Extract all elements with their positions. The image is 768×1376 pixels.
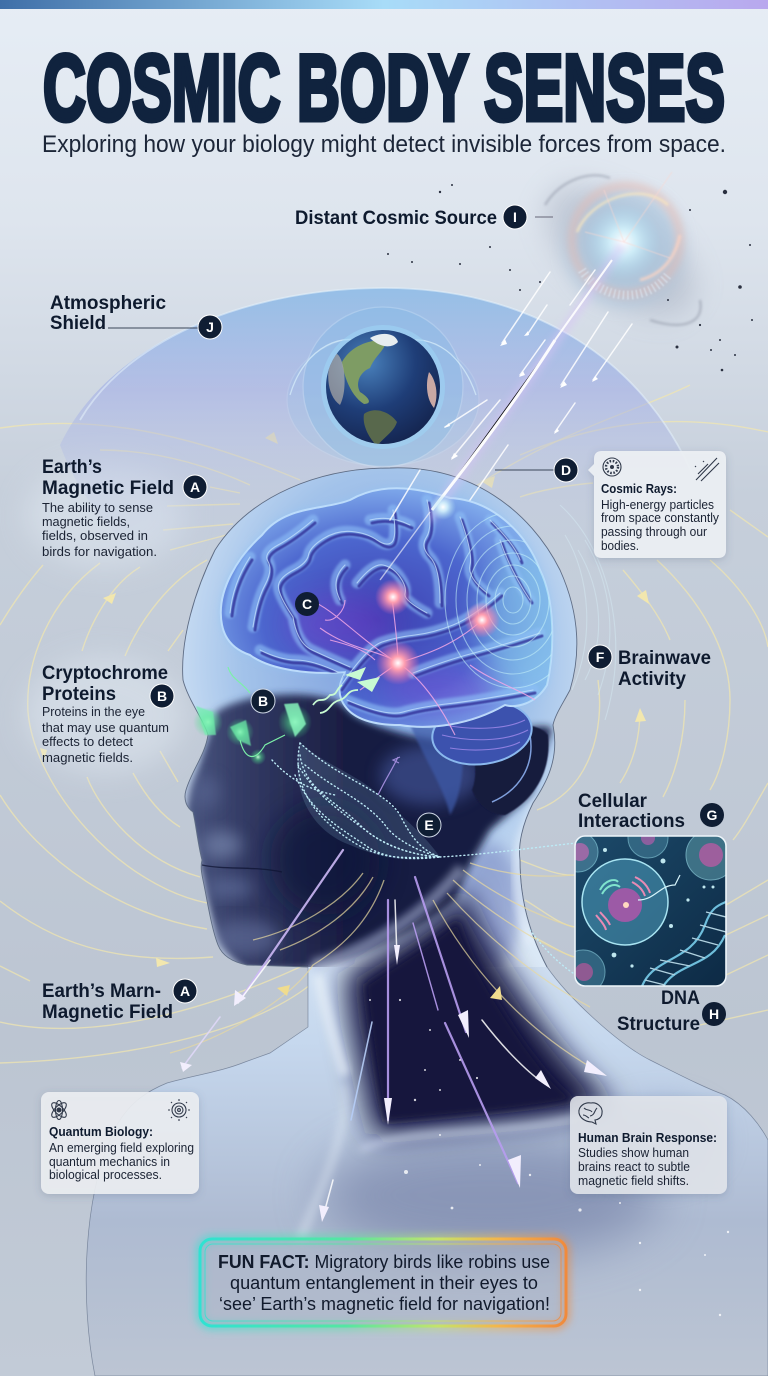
brainwave rings	[444, 514, 552, 688]
label: atmospheric shield: J	[206, 319, 214, 335]
ear	[472, 725, 549, 815]
label: distant cosmic source: I	[513, 209, 517, 225]
label: D pointer	[495, 458, 578, 482]
neighbouring cells	[576, 836, 726, 986]
label: earth's marn magnetic field: A	[180, 983, 190, 999]
label: DNA structure: DNA	[661, 988, 700, 1009]
space dust stars	[387, 184, 753, 371]
panel: quantum biology: quantum mechanics in	[49, 1155, 170, 1169]
badge: B on face: B	[258, 693, 268, 709]
label: earth's magnetic field: birds for navigation.	[42, 545, 157, 559]
chest band	[360, 1112, 600, 1150]
deep cheek	[261, 804, 343, 919]
figure: head	[183, 468, 577, 967]
chin	[211, 920, 279, 956]
icon: particle sphere	[603, 458, 621, 476]
subtitle: Exploring how your biology might detect invisible forces from space.	[42, 131, 726, 158]
neck side midtone	[458, 843, 522, 967]
badge: C on brain	[295, 592, 319, 616]
icon: atmospheric shield dome	[60, 288, 695, 580]
label: cryptochrome proteins: Cryptochrome	[42, 663, 168, 684]
panel: human brain response: magnetic field shifts.	[578, 1174, 689, 1188]
neck left highlight	[318, 975, 345, 1075]
icon: distant cosmic source galaxy	[522, 160, 718, 340]
label: earth's marn magnetic field: Magnetic Field	[42, 1002, 173, 1023]
neural pathways	[310, 597, 535, 735]
label: DNA structure: Structure	[617, 1014, 700, 1035]
nose	[190, 776, 220, 808]
panel: quantum biology: Quantum Biology:	[49, 1125, 153, 1139]
arrows passing through neck and body	[180, 757, 607, 1222]
label: earth's magnetic field: A	[190, 479, 200, 495]
label: brainwave activity: Brainwave	[618, 648, 711, 669]
label: cryptochrome proteins: Proteins in the eye	[42, 705, 145, 719]
jawline light band	[312, 868, 462, 965]
callout: fun fact: quantum entanglement in their eyes to	[230, 1272, 538, 1293]
brainwave rings outside head	[560, 505, 616, 720]
brain folds	[230, 500, 540, 713]
figure: dark neck	[318, 890, 615, 1150]
label: D pointer: D	[561, 462, 571, 478]
figure: shoulders and chest	[86, 860, 768, 1376]
panel: human brain response: Human Brain Response:	[578, 1131, 717, 1145]
badge: C on brain: C	[302, 596, 312, 612]
icon: atom	[49, 1100, 69, 1120]
label: cryptochrome proteins: that may use quantum	[42, 721, 169, 735]
label: earth's magnetic field	[42, 457, 207, 559]
mouth line	[202, 865, 282, 872]
label: earth's magnetic field: fields, observed in	[42, 529, 148, 543]
brain stem	[410, 725, 463, 815]
label: cryptochrome proteins	[42, 663, 174, 765]
brain	[221, 488, 581, 815]
panel: cosmic rays	[588, 451, 726, 558]
callout: fun fact: ‘see’ Earth’s magnetic field for navigation!	[219, 1293, 550, 1314]
label: cellular interactions: G	[707, 807, 718, 823]
label: cryptochrome proteins: magnetic fields.	[42, 751, 133, 765]
panel: cosmic rays: High-energy particles	[601, 498, 714, 512]
label: brainwave activity: F	[596, 649, 605, 665]
upper lip	[202, 831, 242, 859]
panel: cosmic rays: from space constantly	[601, 511, 720, 525]
top gradient bar	[0, 0, 768, 9]
panel: cosmic rays: passing through our	[601, 525, 707, 539]
main cell	[582, 859, 680, 945]
panel: human brain response	[570, 1096, 727, 1194]
label: brainwave activity	[588, 645, 711, 690]
panel: quantum biology: An emerging field exploring	[49, 1141, 194, 1155]
label: distant cosmic source: Distant Cosmic Source	[295, 208, 497, 229]
cerebrum	[221, 488, 552, 727]
icon: concentric target	[168, 1099, 190, 1121]
brain sulci	[232, 503, 542, 716]
lower lip	[206, 878, 254, 898]
badge: E on jaw: E	[424, 817, 434, 833]
panel: cosmic rays: Cosmic Rays:	[601, 482, 677, 496]
label: brainwave activity: Activity	[618, 669, 686, 690]
panel: quantum biology: biological processes.	[49, 1168, 162, 1182]
cerebellum	[428, 695, 536, 771]
dome rim	[80, 288, 695, 480]
icon: brain	[579, 1103, 602, 1124]
panel: quantum biology	[41, 1092, 199, 1194]
cosmic ray arrows from source	[380, 245, 632, 580]
head outline	[183, 468, 577, 967]
particle wave helix	[272, 743, 576, 975]
label: earth's marn magnetic field	[42, 979, 197, 1023]
label: DNA structure: H	[709, 1006, 719, 1022]
field arrow markers	[277, 985, 502, 1000]
panel: human brain response: Studies show human	[578, 1146, 689, 1160]
glowing neural nodes	[375, 579, 500, 685]
label: atmospheric shield: Shield	[50, 313, 106, 334]
icon: green eye cryptochrome signals	[193, 667, 380, 765]
label: earth's magnetic field: Earth’s	[42, 457, 102, 478]
panel: cell and DNA illustration	[574, 835, 727, 987]
figure: face shading	[186, 695, 552, 970]
purple haze	[285, 595, 500, 712]
temple glow	[380, 745, 480, 805]
badge: E on jaw	[417, 813, 441, 837]
panel: cosmic rays: bodies.	[601, 539, 639, 553]
neck field lines	[170, 863, 605, 1075]
neck rim glow	[518, 800, 540, 945]
panel: human brain response: brains react to subtle	[578, 1160, 690, 1174]
label: cryptochrome proteins: Proteins	[42, 684, 116, 705]
icon: earth with magnetosphere	[287, 307, 479, 467]
label: atmospheric shield	[50, 293, 222, 339]
label: cryptochrome proteins: B	[157, 688, 167, 704]
cyan wash	[480, 550, 570, 700]
label: cellular interactions: Cellular	[578, 791, 648, 812]
label: earth's magnetic field: magnetic fields,	[42, 515, 130, 529]
label: DNA structure	[617, 988, 726, 1035]
badge: B on face	[251, 689, 275, 713]
label: cryptochrome proteins: effects to detect	[42, 735, 134, 749]
label: earth's marn magnetic field: Earth’s Marn-	[42, 981, 161, 1002]
callout: fun fact: FUN FACT: Migratory birds like robins use	[218, 1251, 550, 1272]
text halos	[25, 463, 185, 773]
label: cellular interactions: Interactions	[578, 811, 685, 832]
fold highlights	[230, 500, 540, 713]
body stars	[369, 999, 729, 1316]
label: earth's magnetic field: Magnetic Field	[42, 478, 174, 499]
label: atmospheric shield: Atmospheric	[50, 293, 166, 314]
label: earth's magnetic field: The ability to sense	[42, 501, 153, 515]
callout: fun fact	[200, 1239, 566, 1326]
chest shading	[300, 1085, 720, 1257]
label: cellular interactions	[578, 791, 724, 832]
magnetic field lines	[0, 385, 768, 1063]
icon: ray streaks	[695, 458, 719, 481]
floating particles	[603, 848, 714, 968]
DNA helix	[641, 901, 726, 986]
